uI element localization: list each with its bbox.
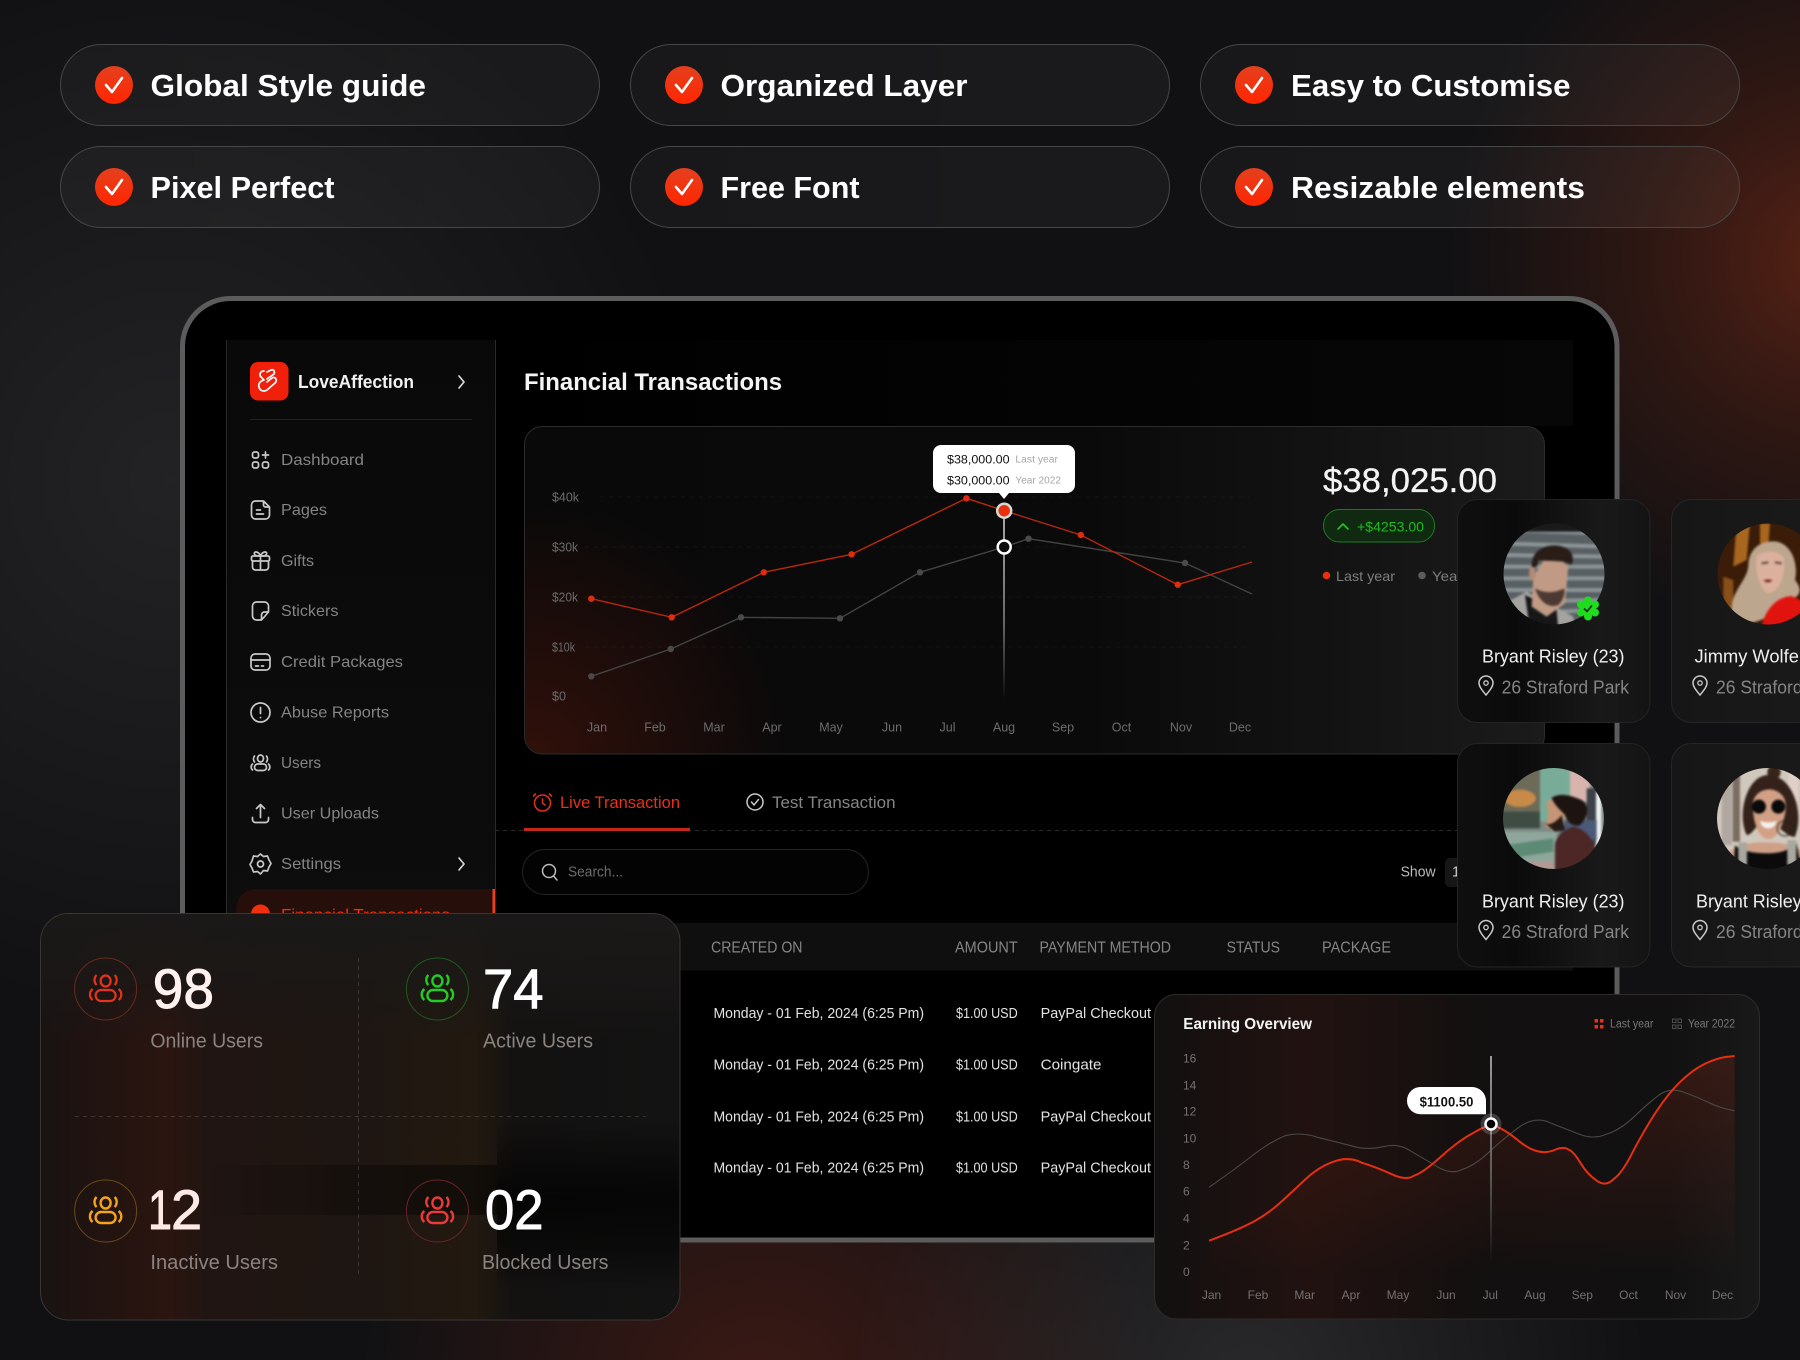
row 1: PayPal Checkout xyxy=(1041,1006,1151,1022)
address: 26 Straford Park xyxy=(1502,678,1630,698)
brand name: LoveAffection xyxy=(298,372,414,392)
avatar: blonde woman xyxy=(1718,524,1800,624)
tooltip xyxy=(1407,1087,1486,1114)
page size control: 1 xyxy=(1452,865,1460,881)
x axis labels: Dec xyxy=(1712,1288,1733,1302)
stat: Blocked Users xyxy=(406,1178,608,1274)
x axis labels: Sep xyxy=(1052,721,1074,735)
logo xyxy=(250,362,288,400)
menu: Abuse Reports xyxy=(251,703,389,722)
x axis labels: Oct xyxy=(1619,1288,1638,1302)
x axis labels: Feb xyxy=(644,721,666,735)
stat: Inactive Users: Inactive Users xyxy=(150,1252,278,1274)
sidebar xyxy=(226,340,496,940)
menu: Settings xyxy=(250,854,464,874)
tooltip: Year 2022 xyxy=(1015,474,1061,486)
pill: Easy to Customise xyxy=(1200,44,1740,126)
avatar: man with stubble xyxy=(1504,524,1604,624)
pill: Easy to Customise: Easy to Customise xyxy=(1291,68,1570,103)
menu: Stickers: Stickers xyxy=(281,603,338,620)
row 3 xyxy=(714,1109,1151,1125)
pill: Pixel Perfect: Pixel Perfect xyxy=(150,170,334,205)
series: last year xyxy=(588,495,1252,620)
menu: Credit Packages: Credit Packages xyxy=(281,654,403,671)
tab: Live Transaction: Live Transaction xyxy=(560,793,680,812)
legend xyxy=(1323,568,1500,584)
menu: Users xyxy=(251,755,321,772)
search box xyxy=(522,850,868,894)
tooltip: Last year xyxy=(1015,454,1058,466)
y axis labels: 12 xyxy=(1183,1105,1197,1119)
stat: Active Users xyxy=(406,957,593,1052)
profile card: Bryant Risley cropped xyxy=(1672,744,1800,967)
stat: Inactive Users xyxy=(75,1178,278,1274)
menu: Financial Transactions active: Financial Transactions xyxy=(281,907,450,924)
x axis labels: Nov xyxy=(1170,721,1193,735)
x axis labels: Jul xyxy=(940,721,955,735)
stat: Online Users xyxy=(75,957,263,1052)
y axis labels: 4 xyxy=(1183,1212,1190,1226)
feature pills xyxy=(60,44,1740,228)
row 2 xyxy=(714,1058,1102,1074)
y axis labels: 2 xyxy=(1183,1238,1190,1252)
row 2: Coingate xyxy=(1041,1058,1102,1074)
y axis labels: $30k xyxy=(552,541,579,555)
x axis labels: Mar xyxy=(703,721,725,735)
x axis labels: Jan xyxy=(1202,1288,1221,1302)
tooltip: $38,000.00 xyxy=(947,453,1010,467)
pill: Global Style guide: Global Style guide xyxy=(150,68,426,103)
pill: Resizable elements: Resizable elements xyxy=(1291,170,1585,205)
profile card: Jimmy Wolfe xyxy=(1672,500,1800,722)
pill: Organized Layer xyxy=(630,44,1170,126)
page title: Financial Transactions xyxy=(524,369,782,396)
name: Bryant Risley (23) xyxy=(1482,892,1624,912)
legend: Last year xyxy=(1610,1018,1654,1030)
series: year 2022 xyxy=(588,536,1252,680)
stat: Online Users: 98 xyxy=(153,957,214,1020)
legend xyxy=(1594,1018,1735,1030)
stat: Blocked Users: 02 xyxy=(485,1178,544,1241)
table header: CREATED ON xyxy=(711,940,802,957)
legend: Year 2022 xyxy=(1432,568,1500,584)
y axis labels: 14 xyxy=(1183,1078,1197,1092)
row 4: $1.00 USD xyxy=(956,1161,1018,1177)
y axis labels xyxy=(552,491,580,704)
stat: Blocked Users: Blocked Users xyxy=(482,1252,608,1274)
y axis labels: $10k xyxy=(552,641,576,655)
menu: Financial Transactions active xyxy=(236,889,495,940)
marker guide line xyxy=(1490,1056,1492,1262)
address: 26 Straford Park xyxy=(1502,922,1630,942)
hover markers xyxy=(997,504,1011,554)
x axis labels xyxy=(587,721,1251,735)
row 1: Monday - 01 Feb, 2024 (6:25 Pm) xyxy=(714,1006,924,1022)
y axis labels: 0 xyxy=(1183,1265,1190,1279)
x axis labels: Sep xyxy=(1572,1288,1593,1302)
change badge: +$4253.00 xyxy=(1357,519,1424,535)
profile card: Bryant Risley bottom xyxy=(1458,744,1650,967)
legend: Year 2022 xyxy=(1688,1018,1735,1030)
panel: earning overview xyxy=(1154,994,1760,1319)
menu: Pages xyxy=(252,501,327,519)
row 4: PayPal Checkout xyxy=(1041,1161,1151,1177)
stat: Inactive Users: 2 xyxy=(171,1178,202,1241)
avatar: laughing man xyxy=(1503,768,1604,869)
pill: Free Font xyxy=(630,146,1170,228)
y axis labels: 8 xyxy=(1183,1158,1190,1172)
panel: transactions line chart xyxy=(524,426,1544,754)
y axis labels: 16 xyxy=(1183,1051,1197,1065)
y axis labels xyxy=(1183,1051,1197,1279)
series: year 2022 xyxy=(1209,1090,1735,1187)
x axis labels: Jan xyxy=(587,721,607,735)
change badge xyxy=(1324,510,1434,542)
x axis labels: Apr xyxy=(762,721,782,735)
menu: Gifts: Gifts xyxy=(281,553,314,570)
x axis labels: Jun xyxy=(882,721,902,735)
tab: Test Transaction: Test Transaction xyxy=(772,793,896,812)
menu: Abuse Reports: Abuse Reports xyxy=(281,705,389,722)
legend: Last year xyxy=(1336,568,1395,584)
x axis labels xyxy=(1202,1288,1733,1302)
x axis labels: Jul xyxy=(1483,1288,1498,1302)
menu: Users: Users xyxy=(281,755,321,772)
stat: Inactive Users: 1 xyxy=(148,1178,172,1241)
stat: Active Users: Active Users xyxy=(483,1031,593,1053)
marker xyxy=(1480,1114,1502,1134)
pill: Global Style guide xyxy=(60,44,600,126)
x axis labels: Aug xyxy=(1524,1288,1546,1302)
table header: STATUS xyxy=(1227,940,1280,957)
device frame xyxy=(182,298,1617,1240)
chevron xyxy=(459,376,464,388)
table header: PACKAGE xyxy=(1322,940,1391,957)
verified badge xyxy=(1577,596,1599,620)
name: Bryant Risley (23) xyxy=(1482,647,1624,667)
area under last year curve xyxy=(1209,1056,1735,1273)
pill: Pixel Perfect xyxy=(60,146,600,228)
total amount: $38,025.00 xyxy=(1323,462,1497,500)
page size control xyxy=(1401,858,1485,887)
y axis labels: $0 xyxy=(552,690,566,704)
menu: Pages: Pages xyxy=(281,502,327,519)
x axis labels: Jun xyxy=(1436,1288,1456,1302)
page size control: Show xyxy=(1401,865,1436,881)
stat: Active Users: 74 xyxy=(483,957,544,1020)
pill: Organized Layer: Organized Layer xyxy=(720,68,968,103)
row 2: $1.00 USD xyxy=(956,1058,1018,1074)
tooltip: $30,000.00 xyxy=(947,473,1010,487)
pill: Resizable elements xyxy=(1200,146,1740,228)
row 1: $1.00 USD xyxy=(956,1006,1018,1022)
row 4: Monday - 01 Feb, 2024 (6:25 Pm) xyxy=(714,1161,924,1177)
menu: Dashboard xyxy=(252,452,364,469)
tabs xyxy=(495,793,1460,831)
avatar: woman with sunglasses xyxy=(1713,765,1800,872)
table header: AMOUNT xyxy=(955,940,1018,957)
y axis labels: $40k xyxy=(552,491,580,505)
row 3: PayPal Checkout xyxy=(1041,1109,1151,1125)
x axis labels: Mar xyxy=(1294,1288,1315,1302)
search box: Search... xyxy=(568,865,623,881)
x axis labels: May xyxy=(819,721,844,735)
x axis labels: Aug xyxy=(993,721,1015,735)
x axis labels: Apr xyxy=(1342,1288,1360,1302)
menu: Dashboard: Dashboard xyxy=(281,452,364,469)
panel: user statistics xyxy=(40,914,680,1320)
x axis labels: Dec xyxy=(1229,721,1251,735)
tooltip: $1100.50 xyxy=(1420,1094,1474,1110)
tab: Live Transaction xyxy=(524,793,690,831)
menu: User Uploads: User Uploads xyxy=(281,806,379,823)
earnings curves xyxy=(1209,1056,1735,1273)
row 2: Monday - 01 Feb, 2024 (6:25 Pm) xyxy=(714,1058,924,1074)
y axis labels: 6 xyxy=(1183,1185,1190,1199)
x axis labels: Oct xyxy=(1112,721,1132,735)
stat: Online Users: Online Users xyxy=(150,1031,263,1053)
tooltip xyxy=(933,445,1075,499)
x axis labels: May xyxy=(1387,1288,1409,1302)
profile card: Bryant Risley top xyxy=(1458,500,1650,722)
marker guide line xyxy=(1003,510,1005,700)
menu: Stickers xyxy=(252,602,338,620)
table header xyxy=(495,923,1573,970)
table xyxy=(495,923,1573,1177)
x axis labels: Nov xyxy=(1665,1288,1686,1302)
row 4 xyxy=(714,1161,1151,1177)
panel title: Earning Overview xyxy=(1183,1016,1313,1033)
row 3: Monday - 01 Feb, 2024 (6:25 Pm) xyxy=(714,1109,924,1125)
menu: Settings: Settings xyxy=(281,856,341,873)
pill: Free Font: Free Font xyxy=(720,170,860,205)
row 3: $1.00 USD xyxy=(956,1109,1018,1125)
y axis labels: 10 xyxy=(1183,1131,1197,1145)
menu: Gifts xyxy=(252,552,314,570)
series: last year xyxy=(1209,1056,1735,1241)
x axis labels: Feb xyxy=(1248,1288,1269,1302)
table header: PAYMENT METHOD xyxy=(1040,940,1171,957)
y axis labels: $20k xyxy=(552,591,579,605)
row 1 xyxy=(714,1006,1151,1022)
